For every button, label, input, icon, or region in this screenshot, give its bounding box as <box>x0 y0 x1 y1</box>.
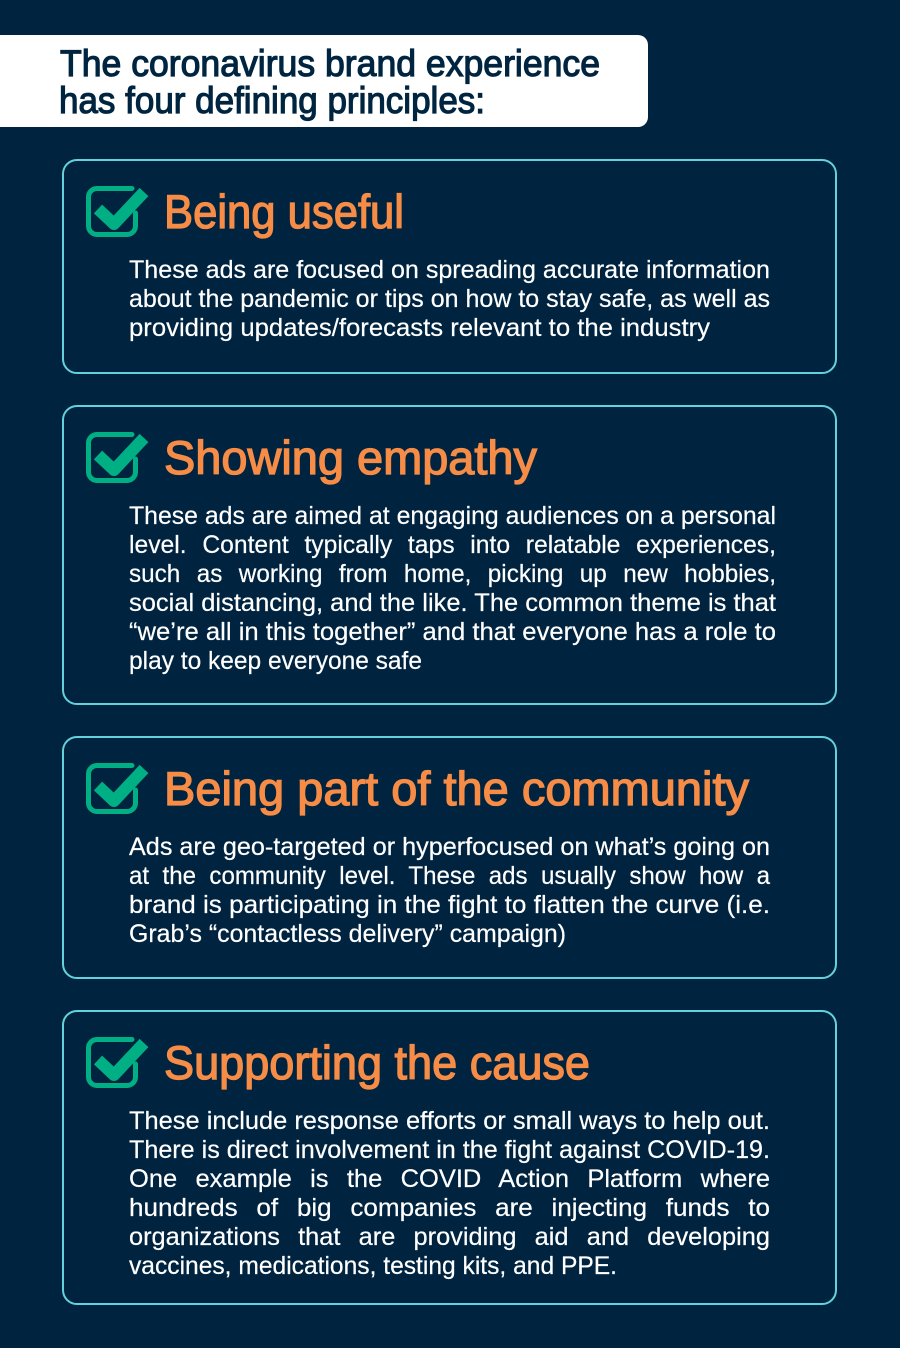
panel: showing empathy: social distancing, and the like. The common theme is that <box>129 589 776 617</box>
title banner: has four defining principles: <box>59 80 485 121</box>
panel: supporting the cause: Supporting the cause <box>164 1036 590 1089</box>
panel: showing empathy: play to keep everyone safe <box>129 647 422 675</box>
panel: supporting the cause: hundreds of big companies are injecting funds to <box>129 1194 770 1222</box>
panel: being useful <box>63 160 836 373</box>
panel: showing empathy: such as working from home, picking up new hobbies, <box>129 560 776 588</box>
panel: supporting the cause: There is direct involvement in the fight against COVID-19. <box>129 1136 770 1164</box>
panel: supporting the cause: One example is the COVID Action Platform where <box>129 1165 770 1193</box>
panel: supporting the cause <box>63 1011 836 1304</box>
title banner: The coronavirus brand experience <box>60 43 600 84</box>
panel: showing empathy: Showing empathy <box>164 431 537 484</box>
panel: supporting the cause: These include response efforts or small ways to help out. <box>129 1107 770 1135</box>
icon: green checkbox <box>88 1040 144 1086</box>
panel: being useful: providing updates/forecasts relevant to the industry <box>129 314 711 342</box>
icon: green checkbox <box>88 434 144 480</box>
panel: being part of the community: Being part of the community <box>164 762 749 815</box>
panel: showing empathy: level. Content typically taps into relatable experiences, <box>129 531 776 559</box>
panel: being useful: These ads are focused on spreading accurate information <box>129 256 770 284</box>
title banner <box>0 35 648 127</box>
panel: being part of the community: Grab’s “contactless delivery” campaign) <box>129 920 566 948</box>
panel: being part of the community: Ads are geo-targeted or hyperfocused on what’s going on <box>129 833 770 861</box>
panel: being part of the community: brand is participating in the fight to flatten the curve (i.e. <box>129 891 770 919</box>
panel: being part of the community <box>63 737 836 978</box>
panel: supporting the cause: organizations that are providing aid and developing <box>129 1223 770 1251</box>
icon: green checkbox <box>88 188 144 234</box>
panel: supporting the cause: vaccines, medications, testing kits, and PPE. <box>129 1252 617 1280</box>
panel: being part of the community: at the community level. These ads usually show how a <box>129 862 770 890</box>
icon: green checkbox <box>88 766 144 812</box>
panel: showing empathy: These ads are aimed at engaging audiences on a personal <box>129 502 776 530</box>
panel: showing empathy: “we’re all in this together” and that everyone has a role to <box>129 618 776 646</box>
panel: showing empathy <box>63 406 836 704</box>
panel: being useful: Being useful <box>164 185 404 238</box>
panel: being useful: about the pandemic or tips on how to stay safe, as well as <box>129 285 770 313</box>
